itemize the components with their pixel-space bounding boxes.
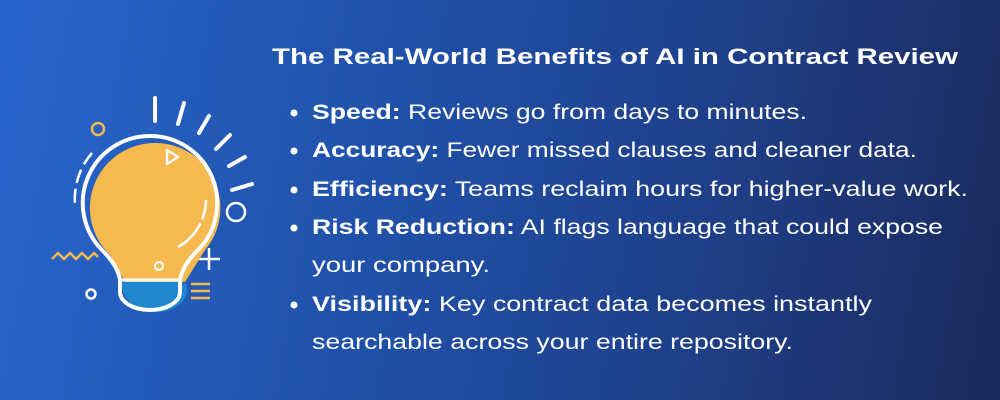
- bullet list: [290, 101, 968, 354]
- bullet list: Visibility: Key contract data becomes instantly: [312, 293, 873, 316]
- bullet list: Speed: Reviews go from days to minutes.: [312, 101, 807, 124]
- rays: [155, 98, 252, 190]
- bulb outline: [83, 136, 217, 310]
- title: The Real-World Benefits of AI in Contract Review: [272, 44, 959, 69]
- bullet list: Risk Reduction: AI flags language that could expose: [312, 216, 943, 239]
- bulb fill: [90, 143, 220, 282]
- plus: [198, 248, 220, 270]
- bullet list: Accuracy: Fewer missed clauses and cleaner data.: [312, 139, 917, 162]
- decor circles: [92, 123, 104, 135]
- bullet list: searchable across your entire repository.: [312, 331, 793, 354]
- bullet list: your company.: [312, 254, 490, 277]
- dashed arc: [75, 153, 92, 205]
- zigzag: [52, 253, 98, 259]
- icon: lightbulb: [52, 98, 252, 312]
- bullet list: Efficiency: Teams reclaim hours for higher-value work.: [312, 178, 968, 201]
- lines: [191, 284, 210, 298]
